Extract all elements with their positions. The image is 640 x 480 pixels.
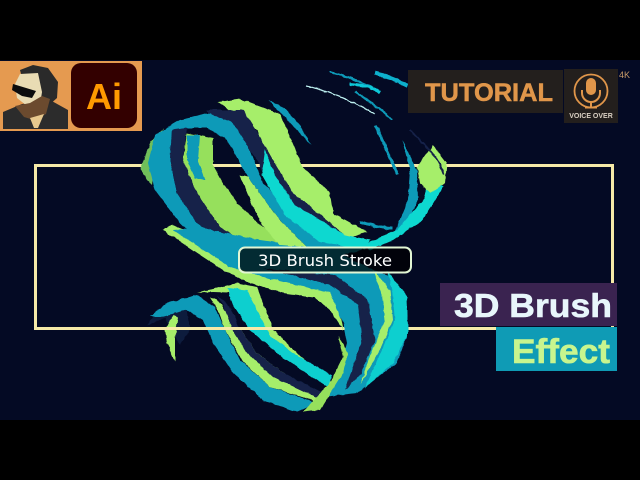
top band navy: [205, 110, 350, 240]
label: 3D Brush Stroke: [239, 248, 411, 272]
dark background panel: [0, 60, 640, 420]
tutorial badge: [408, 69, 630, 123]
icon: Ai app tile: [71, 63, 137, 128]
title: 3D Brush Effect: [440, 283, 617, 371]
left loop lime edge: [140, 128, 163, 185]
strand group: right sweep: [306, 72, 447, 250]
icon: microphone: [574, 74, 608, 108]
S body teal: [173, 228, 408, 397]
icon: Ai app tile: Ai: [86, 76, 122, 117]
left inner lime face: [183, 133, 305, 258]
left loop navy band: [170, 127, 260, 252]
label: 3D Brush Stroke: 3D Brush Stroke: [258, 251, 392, 270]
title: 3D Brush Effect: 3D Brush: [454, 287, 612, 324]
S body cyan lobe: [365, 270, 408, 388]
title: 3D Brush Effect: Effect: [512, 333, 610, 371]
left inner teal patch: [187, 135, 205, 180]
top band teal: [158, 113, 363, 258]
S body navy stripe: [262, 268, 375, 390]
S body lime strip: [360, 270, 393, 385]
left loop teal band: [148, 125, 240, 252]
lower S lime edge: [163, 225, 343, 330]
diagonal lime lower patch: [240, 175, 307, 247]
top band lime: [218, 99, 367, 240]
tutorial badge: VOICE OVER: [569, 113, 613, 120]
logo panel: portrait and Ai: [0, 61, 142, 131]
tutorial badge: 4K: [619, 70, 630, 80]
cream outline rectangle: [36, 166, 612, 328]
lime inner tail: [303, 336, 348, 412]
top band cyan: [262, 150, 370, 250]
icon: bearded portrait with sunglasses: [3, 65, 68, 129]
lower brush band: [147, 283, 332, 412]
upper brush stroke: [140, 72, 447, 412]
tutorial badge: TUTORIAL: [425, 79, 553, 107]
top band teal flick: [268, 100, 311, 145]
